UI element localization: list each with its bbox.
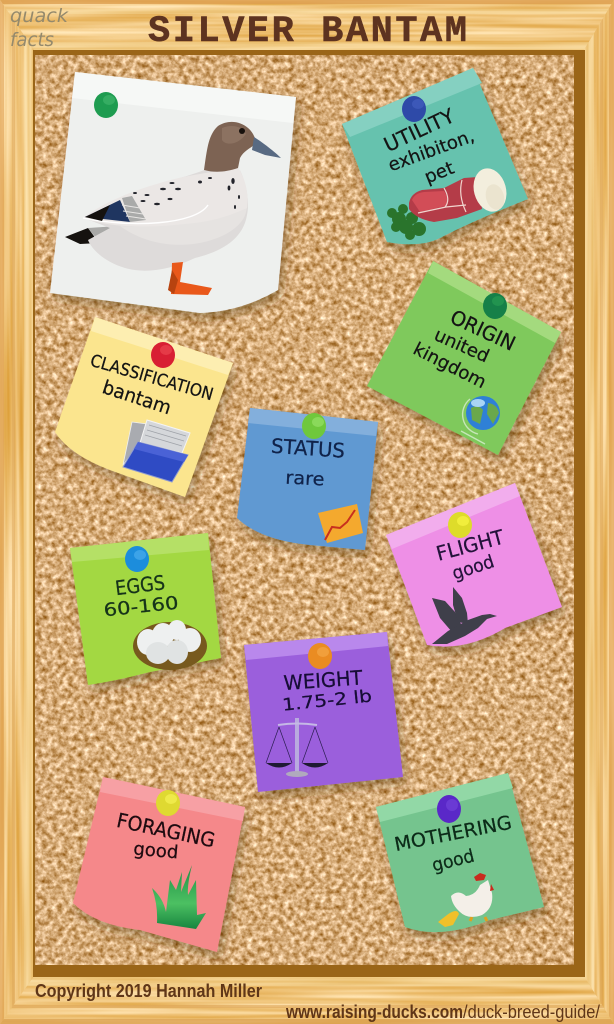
text: mothering [393, 812, 514, 876]
text: eggs: EGGS [114, 570, 166, 600]
text: classification: bantam [100, 376, 174, 419]
note: foraging [73, 777, 245, 952]
text: eggs [103, 570, 179, 621]
icon: grass [152, 865, 206, 929]
pin: olive yellow [156, 790, 180, 816]
pin: dark green [483, 293, 507, 319]
text: origin: kingdom [410, 339, 490, 393]
note: origin [367, 261, 561, 455]
text: flight: good [450, 551, 497, 585]
icon: egg nest [133, 620, 207, 670]
pin: purple [437, 795, 461, 823]
text: status: STATUS [270, 434, 346, 463]
text: weight [281, 665, 373, 716]
icon: growth chart [318, 504, 363, 543]
text: flight [434, 524, 507, 585]
pin: sky blue [125, 546, 149, 572]
note: eggs [70, 533, 221, 685]
icon: globe [461, 396, 500, 444]
icon: balance scale [266, 718, 328, 777]
text: origin: united [431, 325, 492, 367]
text: utility: UTILITY [380, 103, 459, 157]
note: weight [244, 632, 403, 792]
copyright: Copyright 2019 Hannah Miller [35, 981, 262, 1001]
pin: yellow [448, 512, 472, 538]
text: foraging: FORAGING [115, 808, 217, 852]
text: flight: FLIGHT [434, 524, 507, 566]
icon: flying duck [432, 587, 497, 644]
illustration: duck [65, 122, 281, 295]
text: status: rare [285, 467, 325, 490]
note: utility [342, 68, 528, 244]
text: status [270, 434, 346, 490]
pin: blue [402, 96, 426, 122]
text: mothering: MOTHERING [393, 812, 514, 856]
text: utility: pet [422, 158, 457, 188]
pin: light green [302, 413, 326, 439]
text: origin [410, 305, 519, 393]
logo: quack facts: facts [10, 29, 54, 51]
text: mothering: good [430, 846, 477, 876]
title: SILVER BANTAM [148, 11, 467, 53]
icon: meat, egg and herbs [387, 165, 511, 240]
text: utility: exhibiton, [385, 126, 477, 176]
icon: hen and chick [438, 873, 494, 927]
text: utility [380, 103, 477, 188]
pin: red [151, 342, 175, 368]
pin: green [94, 92, 118, 118]
text: classification: CLASSIFICATION [88, 351, 215, 405]
note: status [237, 408, 378, 550]
text: weight: 1.75-2 lb [281, 686, 373, 716]
text: eggs: 60-160 [103, 593, 179, 621]
pin: orange [308, 643, 332, 669]
note: flight [386, 483, 562, 647]
note: duck picture [50, 72, 296, 313]
icon: folder [123, 420, 190, 482]
logo: quack facts [10, 5, 69, 51]
text: origin: ORIGIN [447, 305, 519, 356]
logo: quack facts: quack [10, 5, 69, 27]
note: classification [55, 317, 233, 497]
website url: www.raising-ducks.com [285, 1002, 463, 1022]
website url: /duck-breed-guide/ [463, 1002, 600, 1022]
text: foraging: good [133, 839, 179, 863]
note: mothering [376, 773, 544, 932]
text: weight: WEIGHT [283, 665, 364, 695]
